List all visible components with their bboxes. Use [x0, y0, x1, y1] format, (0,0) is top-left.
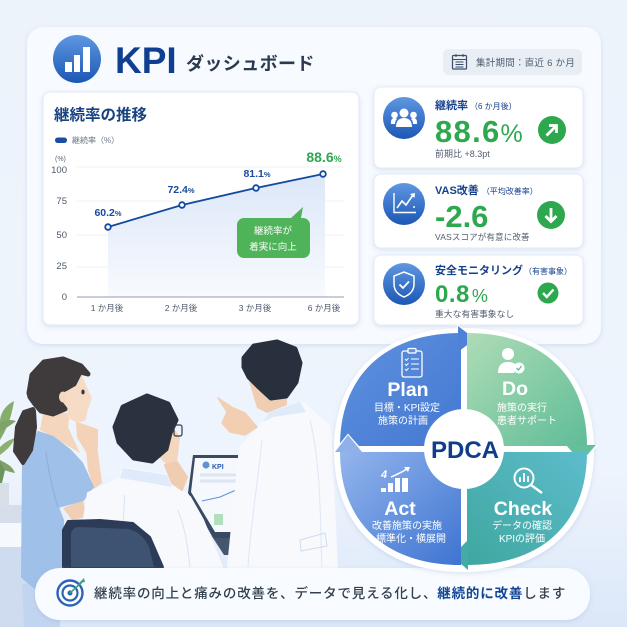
Act segment — [335, 435, 461, 565]
line chart: 72.4% — [167, 184, 195, 196]
legend: 継続率（%） — [72, 135, 119, 145]
Do segment — [467, 333, 596, 462]
KPI card: VAS: -2.6 — [435, 199, 488, 234]
laptop: KPI — [212, 464, 224, 471]
line chart: 88.6% — [306, 149, 342, 165]
icon: people — [383, 97, 425, 139]
line chart: 0 — [62, 292, 67, 303]
Act segment: Act — [384, 498, 416, 520]
KPI card: retention — [374, 87, 583, 168]
line chart: 6 か月後 — [308, 303, 341, 313]
PDCA cycle — [334, 326, 596, 572]
Check segment: Check — [494, 498, 552, 520]
callout — [237, 207, 310, 258]
line chart: 50 — [56, 230, 67, 241]
period badge: 集計期間：直近 6 か月 — [476, 57, 575, 69]
Do segment: 施策の実行 — [497, 401, 547, 414]
panel: retention trend chart — [43, 92, 359, 325]
callout: 着実に向上 — [249, 241, 297, 253]
icon: target — [58, 578, 85, 606]
icon: growth chart: 4 — [380, 469, 387, 481]
Check segment — [452, 452, 587, 570]
line chart: 81.1% — [243, 168, 271, 180]
icon: up arrow — [538, 116, 566, 144]
center label — [424, 409, 504, 489]
banner: summary message — [35, 568, 590, 620]
icon: person check — [498, 348, 524, 374]
legend — [55, 135, 119, 145]
KPI card: safety: 0.8% — [435, 281, 488, 308]
icon: trend chart — [383, 183, 425, 225]
Plan segment: 目標・KPI設定 — [374, 401, 440, 414]
line chart: 1 か月後 — [91, 303, 124, 313]
icon: bar chart logo — [53, 35, 101, 83]
KPI card: safety: 重大な有害事象なし — [435, 308, 514, 319]
KPI card: VAS — [374, 174, 583, 248]
chair — [63, 520, 163, 567]
line chart: 25 — [56, 261, 67, 272]
line chart: 100 — [51, 165, 67, 176]
title: ダッシュボード — [186, 53, 315, 74]
Plan segment — [340, 326, 475, 446]
line chart: 60.2% — [94, 207, 122, 219]
icon: shield — [383, 263, 425, 305]
icon: magnifier chart — [514, 468, 542, 493]
period badge — [443, 49, 582, 75]
title: KPI — [115, 40, 177, 81]
nurse — [15, 359, 102, 627]
Check segment: KPIの評価 — [499, 532, 545, 545]
KPI card: retention: 88.6% — [435, 114, 524, 149]
KPI card: safety: 安全モニタリング（有害事象） — [435, 263, 572, 277]
panel: KPI dashboard — [27, 27, 601, 344]
icon: clipboard — [402, 348, 422, 377]
Check segment: データの確認 — [492, 519, 552, 532]
line chart: 75 — [56, 196, 67, 207]
KPI card: VAS: VAS改善 （平均改善率） — [435, 183, 538, 197]
Plan segment: Plan — [387, 379, 429, 401]
illustration: medical team reviewing dashboard — [0, 342, 337, 627]
line chart: 2 か月後 — [165, 303, 198, 313]
center label: PDCA — [431, 437, 499, 464]
line chart: (%) — [55, 156, 66, 163]
standing doctor — [218, 342, 337, 567]
KPI card: safety — [374, 255, 583, 325]
KPI card: retention: 前期比 +8.3pt — [435, 148, 490, 159]
Do segment: Do — [502, 378, 528, 400]
banner: summary message: 継続率の向上と痛みの改善を、データで見える化し、継続的に改善します — [94, 585, 566, 601]
Act segment: 改善施策の実施 — [372, 519, 442, 532]
icon: check — [538, 282, 558, 304]
title — [115, 40, 315, 81]
KPI card: VAS: VASスコアが有意に改善 — [435, 232, 530, 242]
plant and desk — [0, 401, 28, 627]
Act segment: 標準化・横展開 — [376, 532, 446, 545]
Do segment: 患者サポート — [497, 415, 557, 427]
icon: down arrow — [537, 201, 565, 229]
callout: 継続率が — [254, 225, 292, 237]
chart heading: 継続率の推移 — [54, 106, 148, 124]
line chart — [51, 149, 344, 313]
laptop — [188, 455, 238, 555]
seated doctor — [63, 396, 222, 567]
Plan segment: 施策の計画 — [378, 414, 428, 427]
icon: calendar — [452, 54, 466, 69]
ring — [334, 328, 594, 572]
line chart: 3 か月後 — [239, 303, 272, 313]
KPI card: retention: 継続率（6 か月後） — [435, 98, 517, 112]
